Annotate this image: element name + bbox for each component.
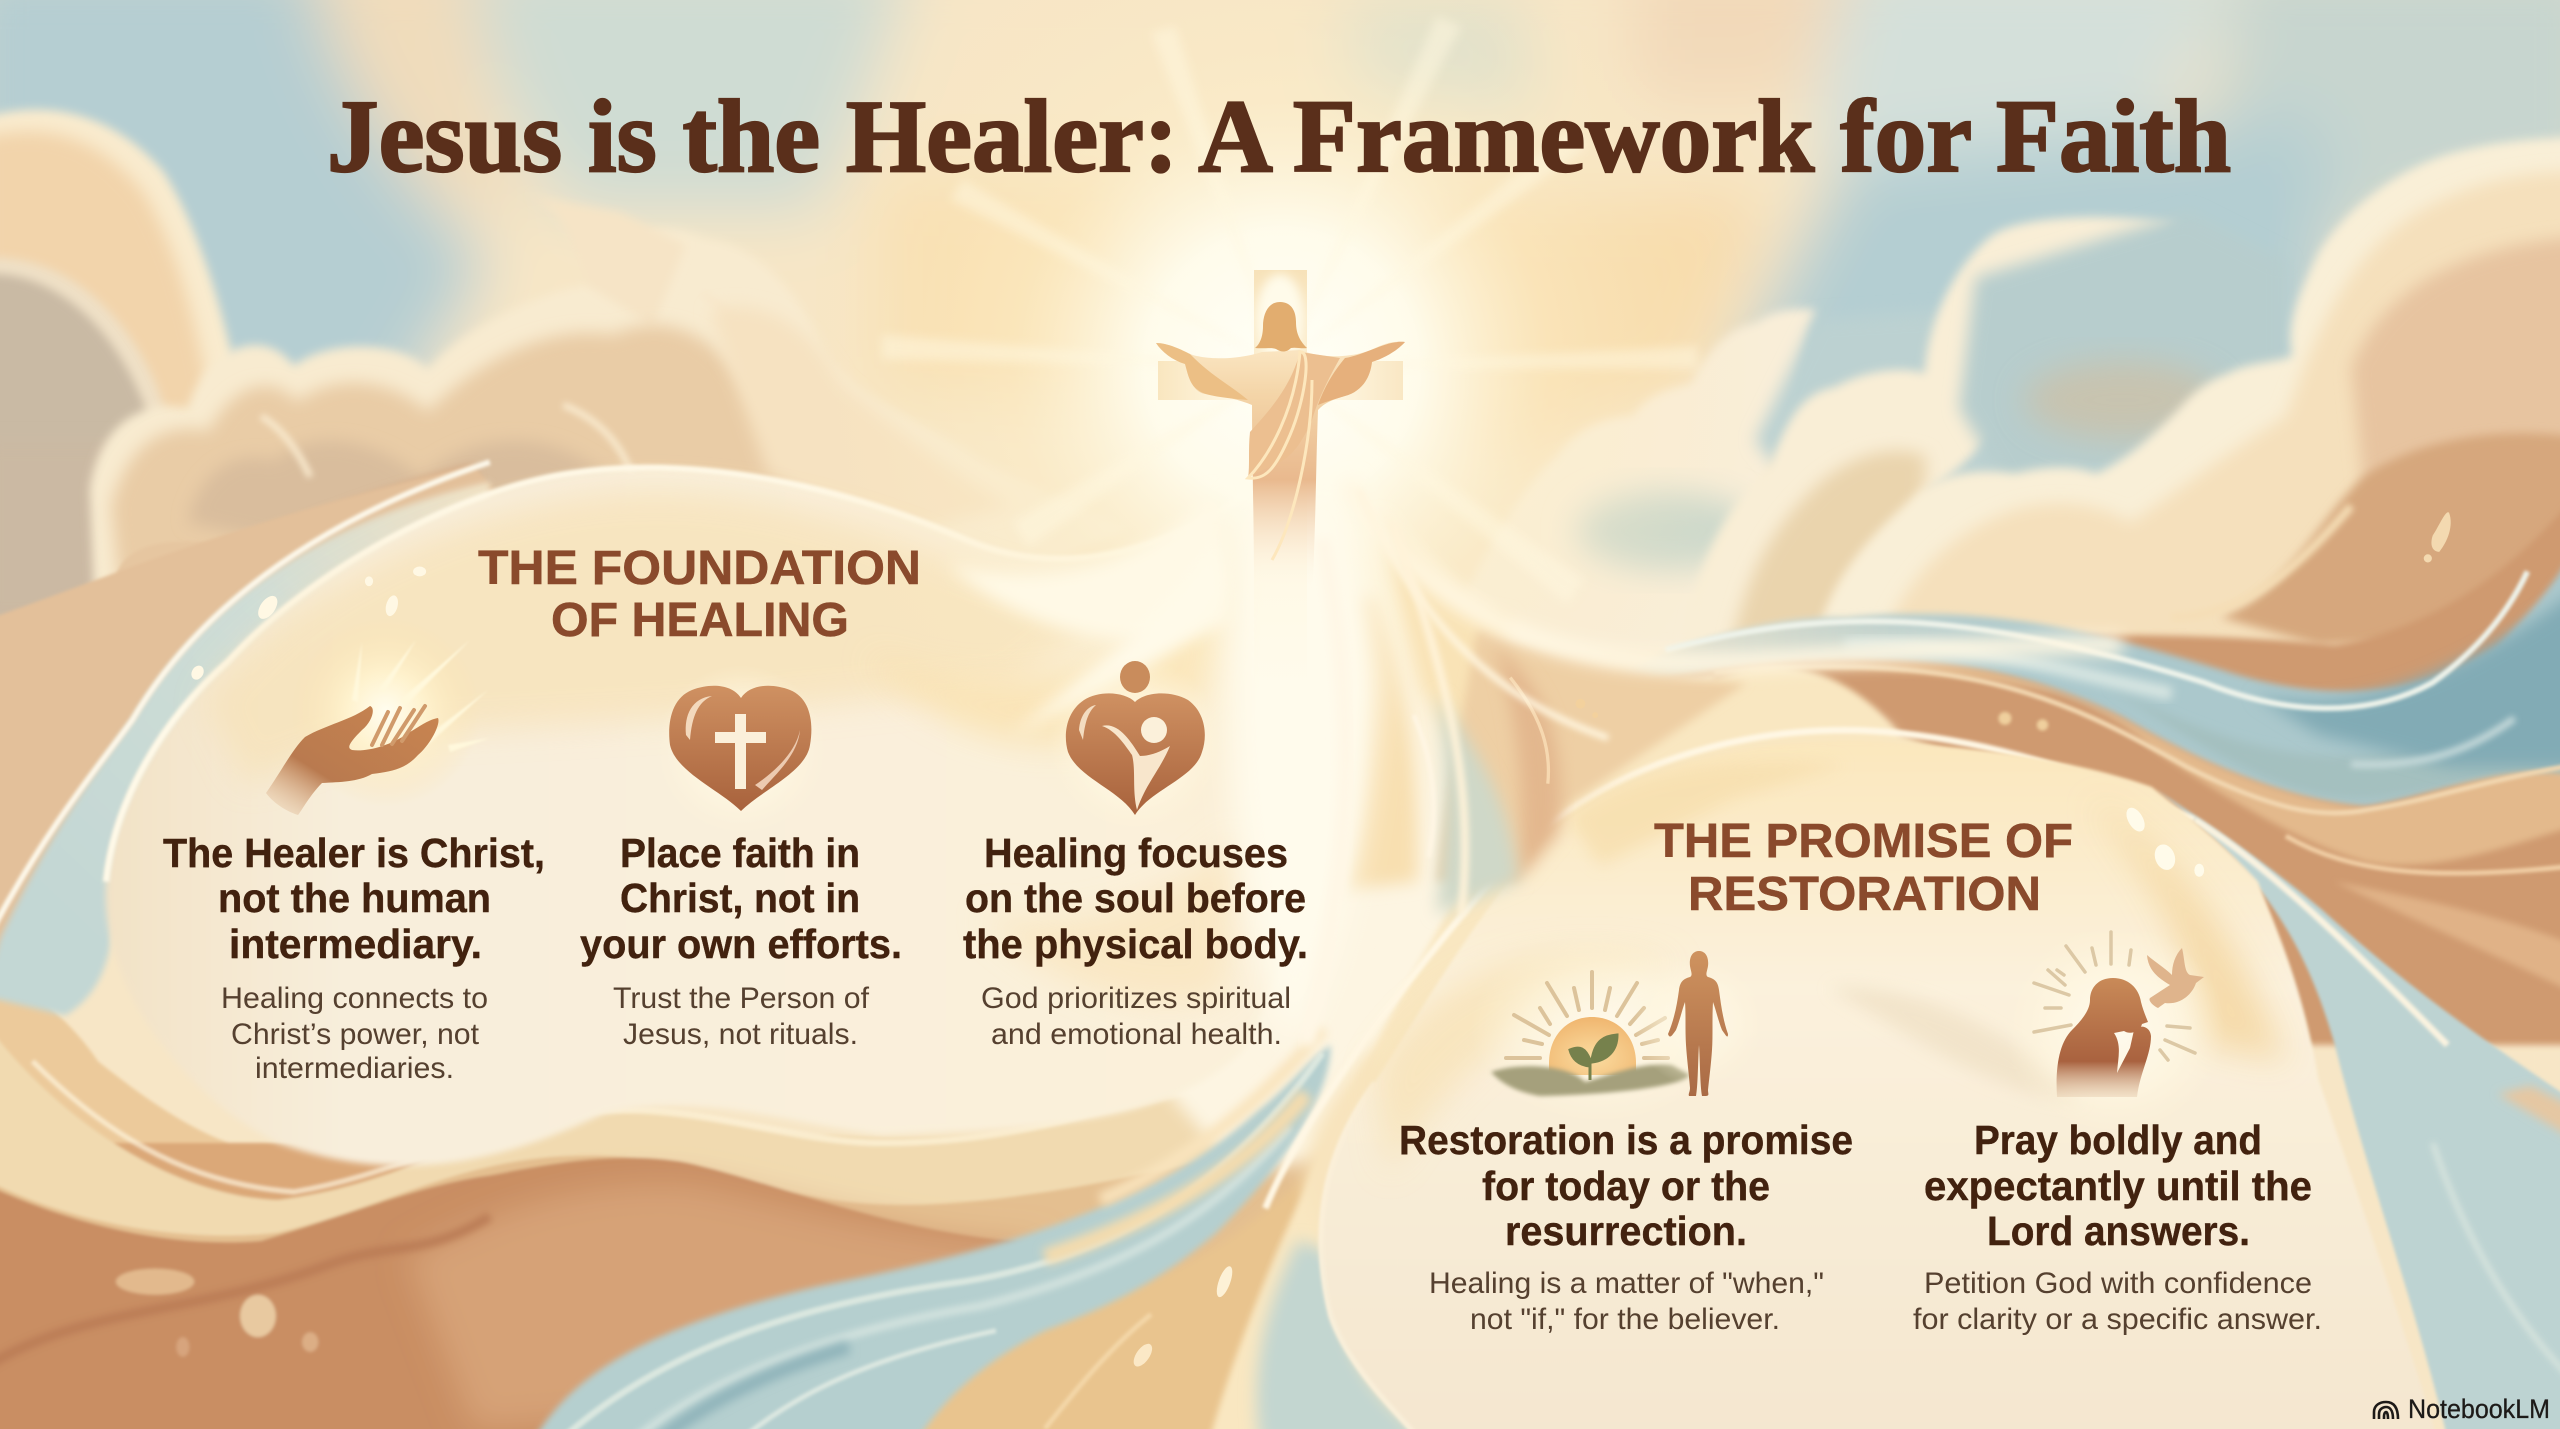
item heading: resurrection.: [1505, 1208, 1747, 1254]
item heading: intermediary.: [229, 921, 482, 967]
flowing light robe: [947, 482, 2123, 1045]
cross: [1158, 270, 1403, 690]
item: place faith in christ: [580, 830, 902, 1051]
figure shading: [1156, 342, 1405, 560]
item text: Christ’s power, not: [231, 1018, 480, 1051]
blue and golden ribbons: [531, 1029, 1388, 1429]
item text: Healing is a matter of "when,": [1429, 1267, 1824, 1300]
item heading: Healing focuses: [984, 830, 1288, 876]
item heading: your own efforts.: [580, 921, 902, 967]
right clouds: [1437, 137, 2560, 669]
item text: for clarity or a specific answer.: [1913, 1303, 2322, 1336]
item text: God prioritizes spiritual: [981, 982, 1291, 1015]
item text: and emotional health.: [991, 1018, 1282, 1051]
icon: praying person and dove: [2005, 925, 2225, 1135]
item heading: the physical body.: [963, 921, 1308, 967]
item text: Healing connects to: [221, 982, 488, 1015]
heading: the promise of restoration: RESTORATION: [1688, 868, 2041, 921]
Jesus on the cross: [1156, 270, 1405, 690]
item: healing focuses on the soul: [963, 830, 1308, 1051]
item: the healer is christ: [163, 830, 545, 1085]
left clouds: [0, 110, 1127, 767]
right panel: [1208, 666, 2447, 1429]
item heading: Christ, not in: [620, 875, 860, 921]
left panel: [0, 462, 1306, 1166]
center stream details: [1342, 513, 1747, 914]
light rays: [882, 16, 1698, 604]
heading: the foundation of healing: OF HEALING: [551, 594, 849, 647]
item text: intermediaries.: [255, 1052, 454, 1085]
item: pray boldly: [1913, 1117, 2322, 1336]
heading: the promise of restoration: THE PROMISE OF: [1654, 815, 2073, 868]
item heading: The Healer is Christ,: [163, 830, 545, 876]
item heading: for today or the: [1482, 1163, 1770, 1209]
title: Jesus is the Healer: A Framework for Faith: [327, 79, 2231, 194]
item text: Petition God with confidence: [1924, 1267, 2312, 1300]
item heading: Pray boldly and: [1974, 1117, 2262, 1163]
item heading: on the soul before: [965, 875, 1306, 921]
icon: heart with cross: [656, 665, 826, 835]
item: restoration is a promise: [1399, 1117, 1853, 1336]
item heading: Place faith in: [620, 830, 860, 876]
item text: Jesus, not rituals.: [623, 1018, 858, 1051]
center stream base: [1127, 490, 1894, 1176]
item text: not "if," for the believer.: [1470, 1303, 1780, 1336]
icon: sunrise, sprout and person: [1470, 935, 1764, 1125]
icon: glowing hand: [266, 617, 490, 815]
logo: NotebookLM: NotebookLM: [2408, 1394, 2550, 1424]
head: [1255, 302, 1307, 352]
item text: Trust the Person of: [613, 982, 870, 1015]
item heading: not the human: [218, 875, 491, 921]
panel: foundation of healing: [163, 542, 1308, 1085]
item heading: Restoration is a promise: [1399, 1117, 1853, 1163]
item heading: expectantly until the: [1924, 1163, 2312, 1209]
icon: soul heart: [1047, 657, 1223, 833]
right waves: [1567, 490, 2560, 1429]
figure robe: [1156, 342, 1405, 600]
lower left sand: [0, 465, 1469, 1429]
panel: promise of restoration: [1399, 815, 2322, 1336]
heading: the foundation of healing: THE FOUNDATION: [478, 542, 921, 595]
item heading: Lord answers.: [1987, 1208, 2250, 1254]
